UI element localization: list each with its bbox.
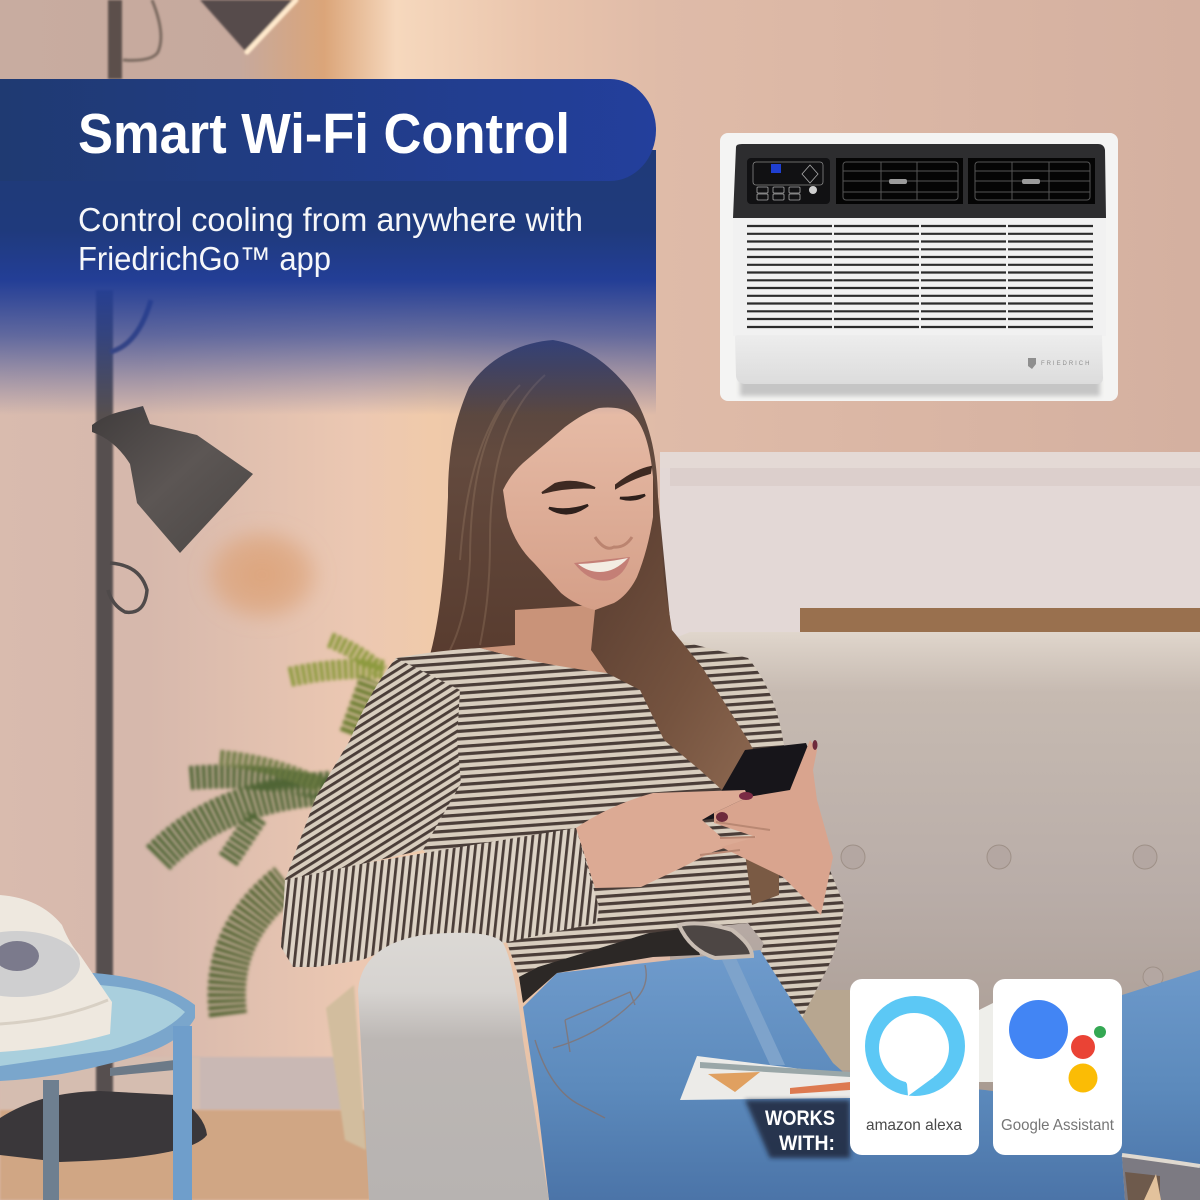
alexa badge xyxy=(850,979,979,1155)
striped sweater torso xyxy=(350,640,795,977)
works with label xyxy=(765,1107,835,1155)
upper frond xyxy=(290,640,385,677)
air conditioner unit xyxy=(720,133,1118,401)
hands xyxy=(576,740,833,915)
houseplant xyxy=(158,640,385,1015)
hair back xyxy=(430,340,672,680)
lamp pole xyxy=(96,290,113,1110)
works with label: WORKS xyxy=(765,1107,835,1130)
eyes xyxy=(549,495,645,513)
icon: google assistant dots xyxy=(1009,1000,1106,1092)
striped sleeve right arm xyxy=(760,853,844,1018)
woman xyxy=(281,340,1200,1200)
table cross bar and back leg xyxy=(110,1060,175,1076)
title: Smart Wi-Fi Control xyxy=(78,102,570,166)
side table with rotary telephone xyxy=(0,895,195,1200)
table top xyxy=(0,973,195,1081)
front panel xyxy=(735,335,1103,384)
phone xyxy=(702,743,810,820)
icon: alexa ring xyxy=(865,996,965,1096)
eyebrows xyxy=(542,467,651,493)
mouth xyxy=(574,557,630,581)
subtitle: FriedrichGo™ app xyxy=(78,240,331,277)
hair highlights xyxy=(450,375,545,650)
trim plate xyxy=(720,133,1118,401)
white grille xyxy=(733,218,1106,336)
sofa back with buttons xyxy=(670,632,1200,1100)
sofa arm xyxy=(358,933,549,1200)
dark shadow under magazine xyxy=(745,1100,850,1158)
lower frond xyxy=(227,882,286,1015)
friedrich logo: FRIEDRICH xyxy=(1041,361,1092,367)
hair under hands xyxy=(745,853,779,905)
nose xyxy=(595,537,632,548)
magazine xyxy=(680,1056,850,1100)
open booklet behind badges xyxy=(979,1003,993,1082)
hair front lock xyxy=(591,477,770,790)
control panel xyxy=(747,158,830,204)
table front leg xyxy=(173,1026,192,1200)
right air vent xyxy=(968,158,1095,204)
sofa buttons xyxy=(841,845,1163,987)
left air vent xyxy=(836,158,963,204)
alexa label: amazon alexa xyxy=(866,1117,962,1134)
belt and buckle xyxy=(519,923,752,1003)
blue gradient panel xyxy=(0,150,656,415)
rotary telephone xyxy=(0,895,112,1052)
lamp cord loop xyxy=(108,563,147,612)
jeans fly placket xyxy=(722,958,785,1065)
google assistant label: Google Assistant xyxy=(1001,1117,1115,1134)
upper pole and cord xyxy=(108,0,161,79)
lamp base xyxy=(0,1091,207,1162)
wicker basket xyxy=(326,985,366,1150)
header band xyxy=(0,79,656,181)
neck xyxy=(480,605,612,676)
dark top housing xyxy=(733,144,1106,218)
subtitle xyxy=(78,201,583,277)
middle frond xyxy=(158,776,330,860)
jeans xyxy=(523,950,1200,1200)
jeans frayed hem xyxy=(1122,1155,1200,1200)
subtitle: Control cooling from anywhere with xyxy=(78,201,583,238)
striped sleeve forearm xyxy=(281,828,599,967)
wainscot wall panel xyxy=(660,452,1200,642)
lower lamp shade xyxy=(92,406,253,553)
google assistant badge xyxy=(993,979,1122,1155)
striped sleeve upper arm xyxy=(285,658,461,905)
works with label: WITH: xyxy=(779,1132,835,1155)
friedrich logo xyxy=(1028,358,1092,369)
floor lamp xyxy=(0,0,297,1162)
jeans pocket and seam stitching xyxy=(535,965,646,1118)
face xyxy=(503,408,653,610)
upper lamp shade xyxy=(200,0,297,53)
